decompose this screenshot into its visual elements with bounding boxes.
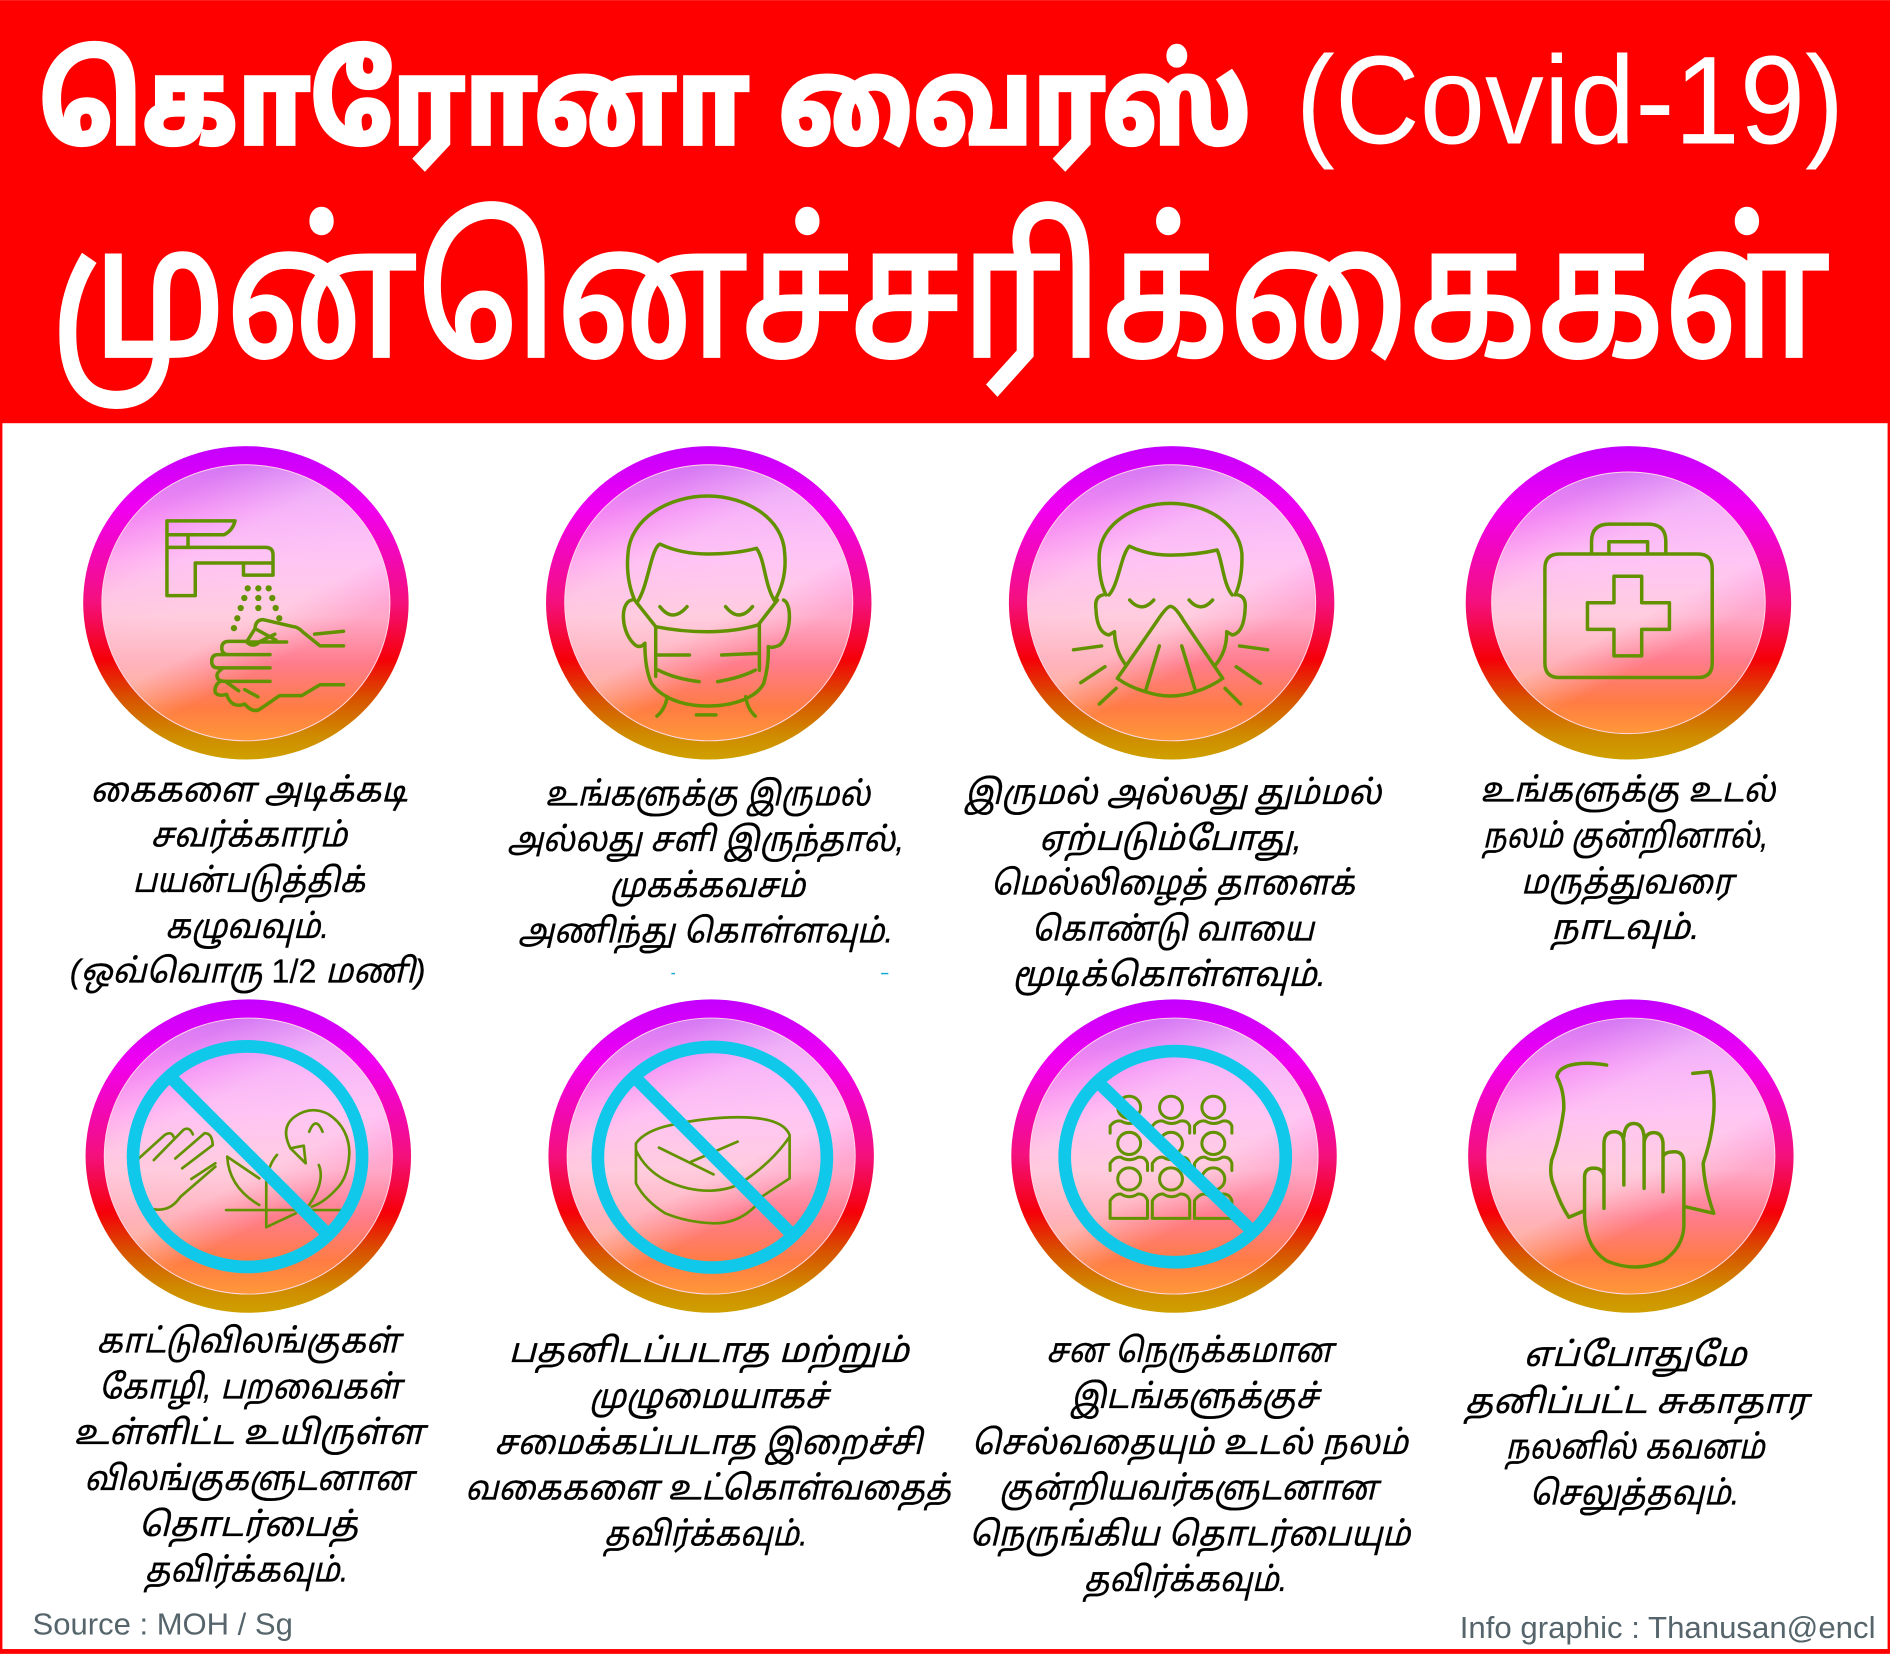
- caption: avoid crowds: சன நெருக்கமான: [1046, 1332, 1337, 1373]
- badge: cover cough: [1009, 446, 1334, 760]
- caption: wash hands: கைகளை அடிக்கடி: [90, 772, 408, 812]
- caption: avoid raw meat: தவிர்க்கவும்.: [603, 1515, 808, 1556]
- panel: cover cough: [964, 446, 1382, 996]
- caption: wear a mask: உங்களுக்கு இருமல்: [545, 775, 871, 816]
- caption: see a doctor: நாடவும்.: [1550, 909, 1700, 950]
- panel: wash hands: [70, 446, 425, 993]
- caption: wash hands: (ஒவ்வொரு 1/2 மணி): [70, 952, 425, 993]
- caption: avoid animals: உள்ளிட்ட உயிருள்ள: [74, 1414, 429, 1455]
- infographic credit: Info graphic : Thanusan@encl: [1460, 1612, 1876, 1645]
- icon: tap and hands: [167, 521, 344, 710]
- caption: personal hygiene: [1463, 1336, 1813, 1515]
- caption: avoid crowds: தவிர்க்கவும்.: [1083, 1561, 1287, 1602]
- icon: raw meat: [636, 1117, 790, 1223]
- title: [39, 31, 1844, 407]
- caption: avoid raw meat: [465, 1332, 951, 1556]
- content panel: [2, 423, 1888, 1649]
- caption: see a doctor: மருத்துவரை: [1521, 863, 1737, 904]
- icon: raised hand with tissue: [1551, 1063, 1714, 1267]
- panel: avoid crowds: [969, 999, 1411, 1602]
- no-entry sign: [598, 1047, 827, 1268]
- caption: avoid raw meat: பதனிடப்படாத மற்றும்: [509, 1332, 910, 1373]
- caption: wear a mask: அணிந்து கொள்ளவும்.: [518, 913, 893, 954]
- panel: wear a mask: [507, 446, 904, 974]
- caption: avoid crowds: [969, 1332, 1411, 1602]
- caption: cover cough: மூடிக்கொள்ளவும்.: [1012, 956, 1326, 996]
- caption: avoid crowds: செல்வதையும் உடல் நலம்: [972, 1424, 1409, 1465]
- caption: avoid crowds: இடங்களுக்குச்: [1070, 1378, 1322, 1419]
- caption: cover cough: [964, 774, 1382, 996]
- panel: avoid animals: [74, 999, 429, 1593]
- panel: see a doctor: [1466, 446, 1791, 950]
- caption: wear a mask: முகக்கவசம்: [610, 867, 806, 907]
- badge: personal hygiene: [1468, 999, 1794, 1313]
- stray cyan marks: [671, 973, 888, 974]
- caption: cover cough: கொண்டு வாயை: [1032, 910, 1316, 951]
- badge: see a doctor: [1466, 446, 1791, 760]
- icon: face with mask: [623, 496, 789, 716]
- caption: cover cough: மெல்லிழைத் தாளைக்: [991, 865, 1355, 906]
- caption: avoid raw meat: சமைக்கப்படாத இறைச்சி: [494, 1424, 924, 1465]
- icon: sneezing face with tissue: [1073, 503, 1268, 704]
- caption: wash hands: கழுவவும்.: [165, 908, 329, 949]
- panel: avoid raw meat: [465, 999, 951, 1556]
- caption: avoid raw meat: முழுமையாகச்: [589, 1378, 832, 1419]
- badge: avoid animals: [86, 999, 411, 1313]
- caption: personal hygiene: எப்போதுமே: [1524, 1336, 1748, 1377]
- no-entry sign: [1065, 1051, 1286, 1262]
- source credit: Source : MOH / Sg: [33, 1609, 293, 1642]
- caption: personal hygiene: நலனில் கவனம்: [1505, 1429, 1766, 1470]
- title: (Covid-19): [1296, 31, 1844, 171]
- caption: avoid animals: கோழி, பறவைகள்: [99, 1368, 406, 1409]
- icon: first aid kit: [1545, 524, 1712, 678]
- caption: see a doctor: [1480, 772, 1776, 950]
- title: கொரோனா வைரஸ்: [39, 38, 1251, 170]
- panel: personal hygiene: [1463, 999, 1813, 1515]
- icon: crowd of people: [1110, 1096, 1232, 1218]
- caption: wash hands: பயன்படுத்திக்: [133, 862, 365, 903]
- caption: see a doctor: உங்களுக்கு உடல்: [1480, 772, 1776, 813]
- caption: wash hands: சவர்க்காரம்: [151, 816, 348, 854]
- caption: wash hands: [70, 772, 425, 993]
- caption: cover cough: இருமல் அல்லது தும்மல்: [964, 774, 1382, 815]
- caption: avoid crowds: நெருங்கிய தொடர்பையும்: [969, 1515, 1411, 1556]
- badge: avoid crowds: [1011, 999, 1337, 1313]
- caption: avoid animals: விலங்குகளுடனான: [84, 1460, 417, 1501]
- caption: cover cough: ஏற்படும்போது,: [1039, 820, 1302, 861]
- caption: avoid animals: [74, 1323, 429, 1593]
- badge: avoid raw meat: [548, 999, 874, 1313]
- caption: avoid crowds: குன்றியவர்களுடனான: [999, 1470, 1382, 1511]
- caption: avoid animals: தொடர்பைத்: [139, 1506, 358, 1547]
- badge: wear a mask: [546, 446, 871, 760]
- caption: personal hygiene: செலுத்தவும்.: [1530, 1474, 1739, 1515]
- caption: see a doctor: நலம் குன்றினால்,: [1482, 817, 1768, 858]
- no-entry sign: [133, 1046, 362, 1267]
- caption: personal hygiene: தனிப்பட்ட சுகாதார: [1463, 1383, 1813, 1424]
- caption: avoid animals: காட்டுவிலங்குகள்: [96, 1323, 405, 1364]
- caption: wear a mask: அல்லது சளி இருந்தால்,: [507, 821, 904, 862]
- badge: wash hands: [83, 446, 409, 760]
- caption: wear a mask: [507, 775, 904, 954]
- caption: avoid raw meat: வகைகளை உட்கொள்வதைத்: [465, 1470, 951, 1511]
- caption: avoid animals: தவிர்க்கவும்.: [144, 1552, 348, 1593]
- icon: hand and bird: [139, 1110, 349, 1227]
